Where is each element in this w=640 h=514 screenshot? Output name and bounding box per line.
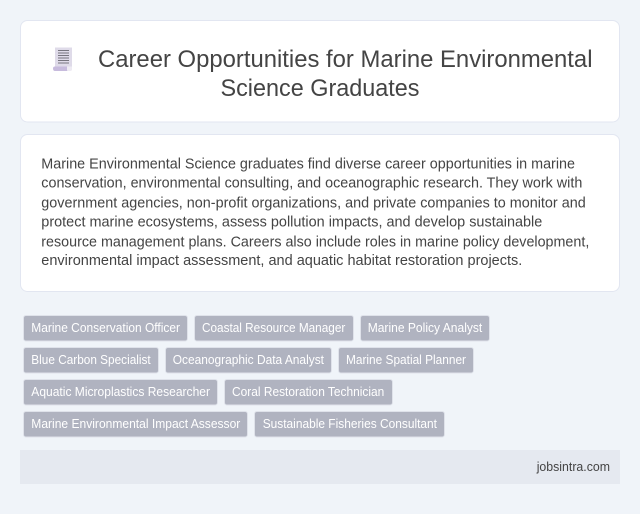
tag: Blue Carbon Specialist — [24, 348, 158, 373]
tag: Blue Carbon Specialist: Blue Carbon Specialist — [31, 353, 151, 367]
text block: description: environmental impact assessment, and aquatic habitat restoration projects. — [41, 253, 522, 269]
tag: Aquatic Microplastics Researcher — [24, 380, 218, 405]
tag: Aquatic Microplastics Researcher: Aquatic Microplastics Researcher — [31, 385, 210, 399]
tag: Coral Restoration Technician: Coral Restoration Technician — [232, 385, 384, 399]
text block: description: resource management plans. Careers also include roles in marine policy development, — [41, 234, 589, 250]
tag: Marine Spatial Planner — [338, 348, 474, 373]
tag: Marine Conservation Officer: Marine Conservation Officer — [31, 321, 180, 335]
icon: document scroll — [53, 48, 72, 71]
tag: Marine Policy Analyst — [360, 316, 490, 341]
panel: career tags — [24, 316, 490, 437]
title: Career Opportunities for Marine Environmental — [98, 46, 592, 73]
tag: Coral Restoration Technician — [224, 380, 392, 405]
tag: Marine Conservation Officer — [24, 316, 188, 341]
panel: footer — [20, 450, 620, 484]
tag: Oceanographic Data Analyst — [166, 348, 332, 373]
tag: Sustainable Fisheries Consultant — [254, 412, 444, 437]
tag: Marine Environmental Impact Assessor: Marine Environmental Impact Assessor — [31, 417, 240, 431]
text block: description: Marine Environmental Science graduates find diverse career opportunities in marine — [41, 156, 575, 172]
tag: Marine Policy Analyst: Marine Policy Analyst — [368, 321, 483, 335]
footer source text: jobsintra.com — [536, 460, 610, 474]
tag: Oceanographic Data Analyst: Oceanographic Data Analyst — [173, 353, 324, 367]
panel: description card — [20, 134, 620, 292]
text block: description: protect marine ecosystems, assess pollution impacts, and develop sustainable — [41, 214, 542, 230]
tag: Marine Spatial Planner: Marine Spatial Planner — [346, 353, 466, 367]
text block: description: conservation, environmental consulting, and oceanographic research. They work with — [41, 176, 582, 192]
tag: Coastal Resource Manager: Coastal Resource Manager — [202, 321, 345, 335]
panel: header card — [20, 20, 620, 122]
text block: description — [41, 156, 589, 269]
title — [98, 46, 592, 102]
tag: Coastal Resource Manager — [194, 316, 354, 341]
text block: description: government agencies, non-profit organizations, and private companies to monitor and — [41, 195, 586, 211]
title: Science Graduates — [220, 75, 420, 102]
tag: Sustainable Fisheries Consultant: Sustainable Fisheries Consultant — [263, 417, 437, 431]
tag: Marine Environmental Impact Assessor — [24, 412, 248, 437]
